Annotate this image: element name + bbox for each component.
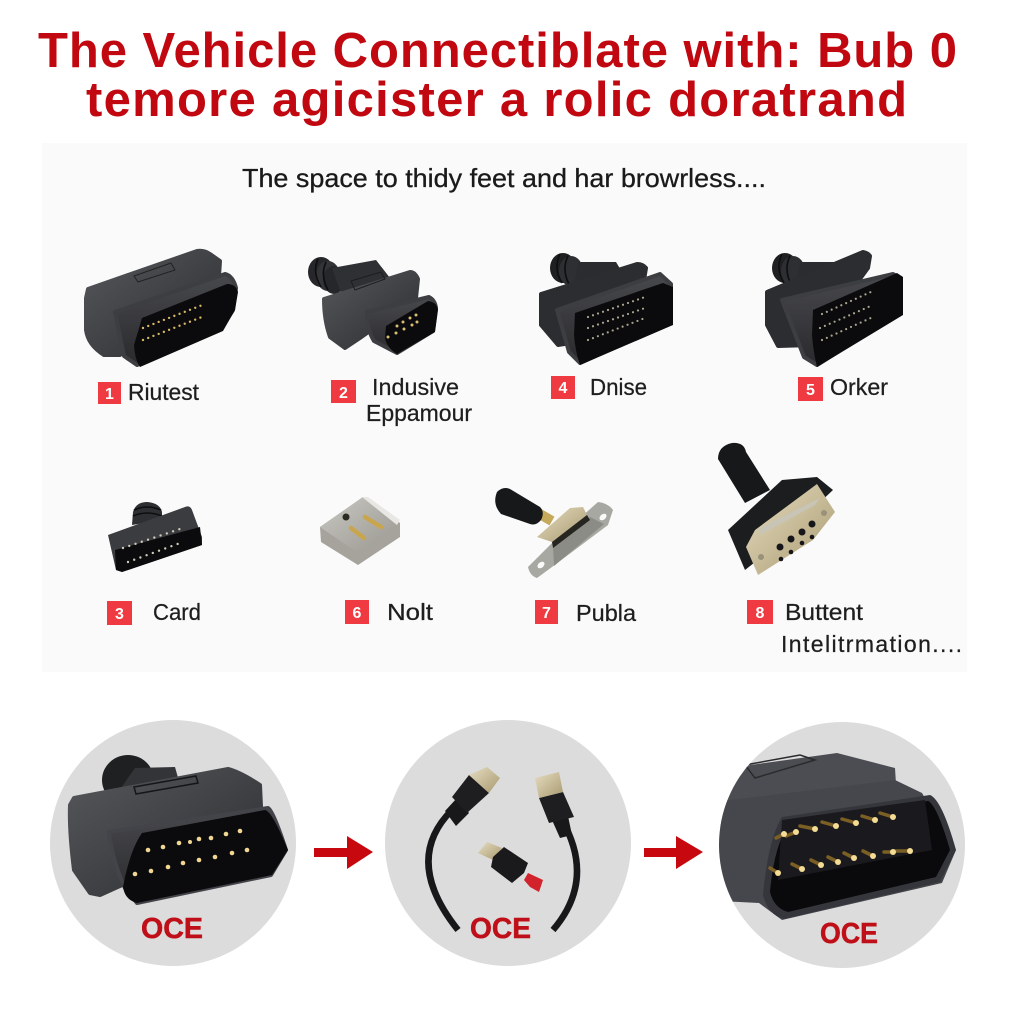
connector 4 with label [541, 253, 673, 400]
connector 2 with label [308, 257, 472, 426]
icon: connector 7 [495, 488, 613, 578]
label 7: Publa [576, 600, 636, 626]
connector 7 with label [495, 488, 636, 626]
icon: large connector [70, 755, 288, 903]
title: The Vehicle Connectiblate with: Bub 0 [38, 24, 957, 78]
panel: circle 2 cables [385, 720, 631, 966]
connector 5 with label [767, 252, 903, 401]
label 4 [551, 374, 647, 400]
label 4: 4 [559, 380, 568, 397]
label 1: Riutest [128, 379, 200, 405]
caption: OCE [820, 918, 878, 950]
icon: right cable [535, 772, 577, 930]
label 2: 2 [339, 385, 348, 402]
connector 6 with label [320, 497, 434, 625]
label 4: Dnise [590, 374, 647, 400]
icon: short plug [478, 842, 543, 892]
connector 1 with label [86, 251, 238, 405]
title: temore agicister a rolic doratrand [86, 73, 907, 127]
caption: OCE [470, 913, 531, 945]
subtitle: The space to thidy feet and har browrless.... [242, 163, 766, 193]
label 3: 3 [115, 606, 124, 623]
icon: connector 4 [541, 253, 673, 365]
label 6 [345, 599, 434, 625]
label 8: 8 [756, 605, 765, 622]
icon: connector 6 [320, 497, 400, 565]
connector 3 with label [107, 502, 202, 625]
label 8 [747, 599, 962, 657]
connector 8 with label [718, 443, 962, 657]
caption: OCE [141, 913, 203, 945]
label 6: Nolt [387, 599, 434, 625]
icon: connector 1 [86, 251, 238, 367]
icon: connector 5 [767, 252, 903, 367]
label 2: Eppamour [366, 400, 472, 426]
label 3: Card [153, 599, 201, 625]
label 2 [331, 374, 472, 426]
label 2: Indusive [372, 374, 459, 400]
title [38, 24, 957, 127]
icon: left cable [428, 767, 500, 930]
label 5: Orker [830, 374, 888, 400]
icon: connector 8 [718, 443, 835, 575]
arrow 1 [314, 836, 373, 869]
label 6: 6 [353, 605, 362, 622]
label 5: 5 [806, 382, 815, 399]
icon: connector 2 [308, 257, 438, 354]
icon: connector 3 [108, 502, 202, 572]
panel: circle 3 close-up [700, 722, 965, 968]
label 5 [798, 374, 888, 401]
label 1: 1 [105, 386, 114, 403]
label 3 [107, 599, 201, 625]
label 8: Buttent [785, 599, 864, 625]
icon: close-up connector [700, 753, 956, 920]
panel: circle 1 large connector [50, 720, 296, 966]
label 8: Intelitrmation.... [781, 631, 962, 657]
arrow 2 [644, 836, 703, 869]
label 7 [535, 600, 636, 626]
label 7: 7 [542, 605, 551, 622]
panel: connector catalogue [42, 143, 967, 672]
